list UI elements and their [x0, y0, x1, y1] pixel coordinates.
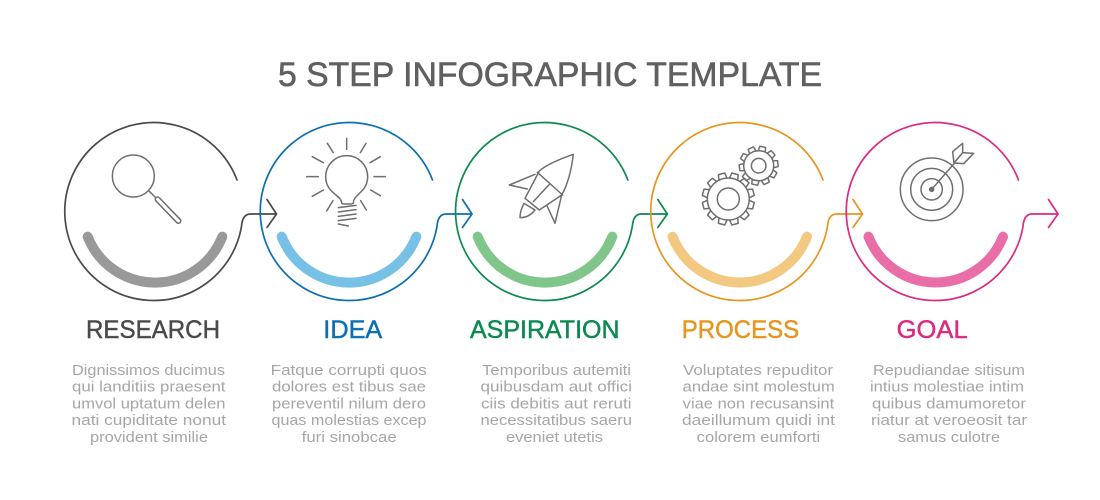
text block: process: Voluptates repuditor — [683, 363, 833, 379]
text block: idea: furi sinobcae — [302, 430, 397, 446]
circular path with arrow: goal — [846, 123, 1058, 301]
text block: aspiration: eveniet utetis — [506, 430, 603, 446]
progress arc: research — [88, 237, 222, 283]
progress arc: goal — [868, 237, 1003, 282]
text block: aspiration — [480, 363, 632, 446]
panel: idea — [260, 123, 472, 446]
text block: process: daeillumum quidi int — [682, 413, 835, 429]
text block: process: colorem eumforti — [697, 430, 820, 446]
text block: aspiration: Temporibus autemiti — [482, 363, 631, 379]
panel: goal — [846, 123, 1058, 446]
heading: process: PROCESS — [682, 316, 799, 344]
text block: research: provident similie — [90, 430, 208, 446]
text block: idea: Fatque corrupti quos — [271, 363, 427, 379]
title: 5 STEP INFOGRAPHIC TEMPLATE — [278, 56, 822, 94]
panel: aspiration — [456, 123, 667, 446]
text block: idea — [271, 363, 427, 446]
text block: aspiration: ciis debitis aut reruti — [481, 396, 632, 412]
heading: aspiration: ASPIRATION — [470, 316, 620, 344]
text block: process — [682, 363, 835, 446]
text block: goal: Repudiandae sitisum — [873, 363, 1025, 379]
text block: idea: dolores est tibus sae — [272, 380, 426, 396]
text block: goal: intius molestiae intim — [870, 380, 1024, 396]
circular path with arrow: aspiration — [456, 123, 667, 301]
text block: idea: quas molestias excep — [272, 413, 426, 429]
icon: magnifying glass — [112, 155, 182, 224]
progress arc: process — [672, 237, 807, 282]
circular path with arrow: process — [651, 123, 862, 301]
text block: aspiration: quibusdam aut offici — [480, 380, 632, 396]
text block: idea: pereventil nilum dero — [272, 396, 426, 412]
progress arc: idea — [282, 237, 416, 283]
text block: process: viae non recusansint — [683, 396, 834, 412]
text block: research — [72, 363, 226, 446]
text block: research: qui landitiis praesent — [72, 380, 226, 396]
icon: light bulb — [307, 138, 385, 226]
icon: rocket — [509, 154, 573, 223]
panel: research — [65, 123, 276, 446]
circular path with arrow: idea — [260, 123, 472, 301]
text block: aspiration: necessitatibus saeru — [480, 413, 632, 429]
text block: research: umvol uptatum delen — [72, 396, 226, 412]
text block: goal: quibus damumoretor — [872, 396, 1026, 412]
heading: research: RESEARCH — [86, 316, 220, 344]
circular path with arrow: research — [65, 123, 276, 301]
icon: gears — [702, 146, 778, 225]
panel: process — [651, 123, 862, 446]
heading: goal: GOAL — [897, 316, 968, 344]
text block: process: andae sint molestum — [683, 380, 835, 396]
text block: goal — [870, 363, 1027, 446]
text block: research: Dignissimos ducimus — [72, 363, 225, 379]
heading: idea: IDEA — [323, 316, 383, 344]
icon: target with dart — [900, 143, 974, 221]
text block: goal: riatur at veroeosit tar — [871, 413, 1027, 429]
text block: research: nati cupiditate nonut — [72, 413, 226, 429]
text block: goal: samus culotre — [898, 430, 1000, 446]
progress arc: aspiration — [478, 237, 612, 283]
